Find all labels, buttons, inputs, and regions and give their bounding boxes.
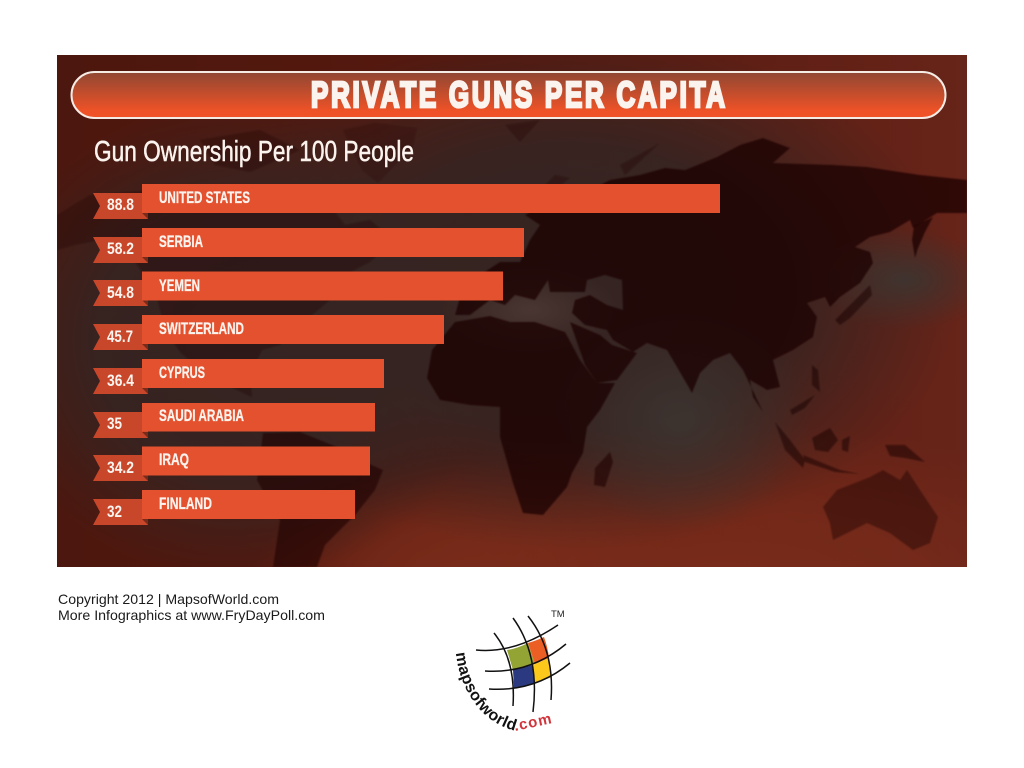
bar: Cyprus 36.4: CYPRUS (159, 363, 205, 382)
bar: Iraq 34.2: 34.2 (107, 458, 134, 477)
world map (57, 120, 967, 567)
bar: Iraq 34.2 (93, 446, 370, 481)
bar: United States 88.8 (93, 184, 720, 219)
copyright text (58, 591, 325, 623)
logo: mapsofworld.com: mapsofworld (456, 652, 518, 730)
bar: Finland 32 (93, 490, 355, 525)
bar: Saudi Arabia 35: SAUDI ARABIA (159, 406, 244, 425)
bar: Yemen 54.8: YEMEN (159, 276, 200, 295)
bar: Serbia 58.2 (93, 228, 524, 263)
bar: United States 88.8: UNITED STATES (159, 188, 250, 207)
bar chart (93, 184, 720, 525)
map: Arabia (570, 322, 637, 383)
logo: mapsofworld.com (456, 609, 570, 735)
logo: mapsofworld.com: .com (512, 710, 553, 735)
bar: Cyprus 36.4: 36.4 (107, 371, 134, 390)
map: South America (257, 432, 383, 567)
map: Iceland and Arctic islands (200, 120, 656, 184)
map: Greenland (343, 123, 417, 183)
subtitle: Gun Ownership Per 100 People (94, 136, 414, 168)
panel: map background (57, 55, 967, 567)
map: Madagascar (594, 452, 613, 487)
title: PRIVATE GUNS PER CAPITA (311, 75, 725, 115)
copyright text: Copyright 2012 | MapsofWorld.com (58, 591, 279, 607)
bar: Finland 32: FINLAND (159, 494, 212, 513)
bar: Switzerland 45.7: SWITZERLAND (159, 319, 244, 338)
copyright text: More Infographics at www.FryDayPoll.com (58, 607, 325, 623)
map: Kamchatka (912, 217, 933, 258)
map: Australia (823, 470, 938, 550)
map: Eurasia (455, 138, 967, 412)
map: North America (57, 190, 395, 397)
bar: Serbia 58.2: SERBIA (159, 232, 203, 251)
trademark: TM (551, 609, 565, 620)
bar: Iraq 34.2: IRAQ (159, 450, 189, 469)
bar: Yemen 54.8 (93, 272, 503, 306)
bar: Yemen 54.8: 54.8 (107, 283, 134, 302)
map: Southeast Asia islands (775, 285, 925, 474)
title banner (72, 72, 946, 118)
bar: Switzerland 45.7: 45.7 (107, 327, 133, 346)
bar: Saudi Arabia 35 (93, 403, 375, 438)
bar: Saudi Arabia 35: 35 (107, 414, 122, 433)
bar: Finland 32: 32 (107, 502, 122, 521)
bar: Cyprus 36.4 (93, 359, 384, 394)
map: Africa (427, 316, 615, 515)
bar: United States 88.8: 88.8 (107, 195, 134, 214)
bar: Switzerland 45.7 (93, 315, 444, 350)
bar: Serbia 58.2: 58.2 (107, 239, 134, 258)
